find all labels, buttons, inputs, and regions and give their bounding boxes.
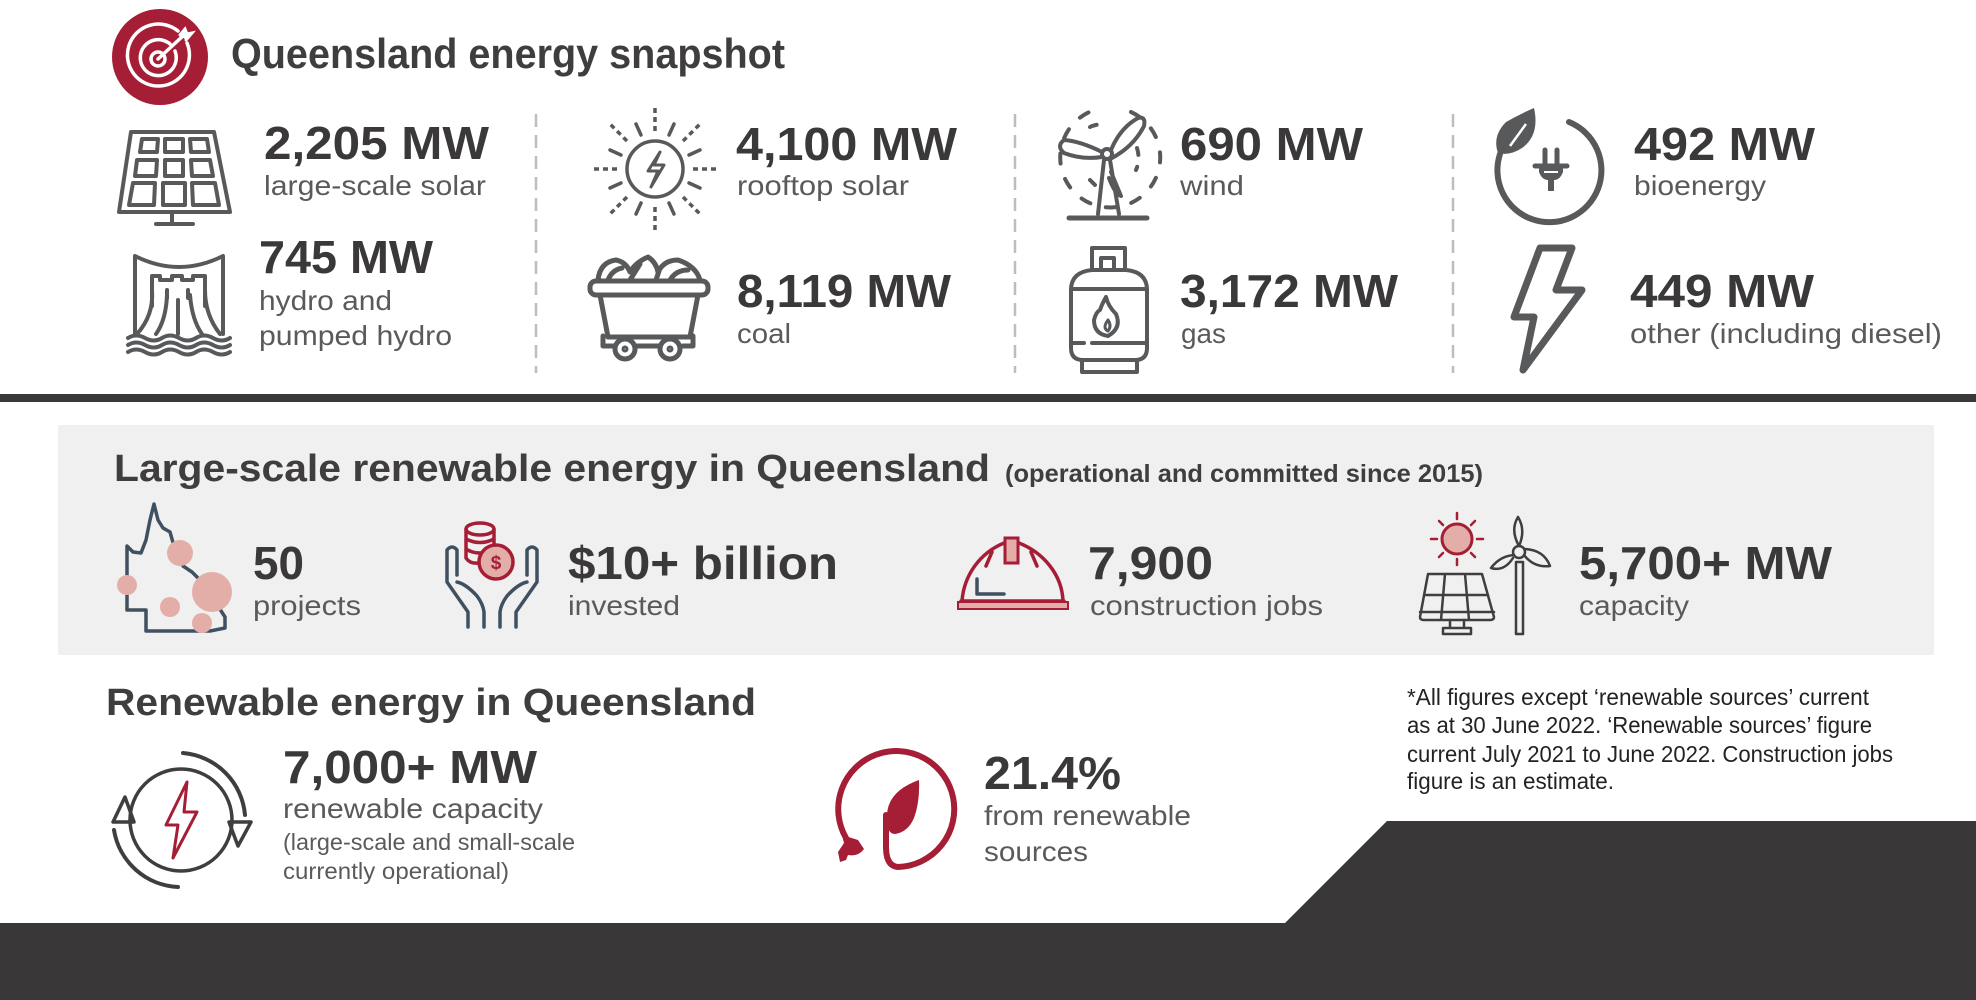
icon: sun, solar panel and wind turbine (1420, 513, 1550, 634)
stat: from renewable sources: 21.4% (984, 747, 1121, 799)
icon: lightning bolt (1514, 248, 1582, 370)
stat: hydro and pumped hydro: hydro and (259, 285, 392, 316)
stat: construction jobs (958, 537, 1323, 621)
icon: hard hat (958, 538, 1068, 609)
stat: invested: invested (568, 590, 680, 621)
icon: leaf with plug cord (838, 751, 954, 867)
stat: renewable capacity (113, 741, 575, 887)
footnote (1407, 684, 1893, 794)
icon: sun with bolt (594, 108, 716, 230)
stat: bioenergy (1496, 108, 1816, 222)
heading: Renewable energy in Queensland: Renewable energy in Queensland (106, 682, 756, 724)
stat: capacity: capacity (1579, 590, 1689, 621)
stat: large-scale solar: large-scale solar (264, 170, 486, 201)
icon: coal cart (590, 257, 708, 359)
icon: hydro dam (128, 256, 230, 354)
stat: bioenergy: 492 MW (1634, 118, 1816, 170)
icon: hands holding coins: $ (491, 553, 502, 574)
footnote: figure is an estimate. (1407, 768, 1614, 794)
footnote: current July 2021 to June 2022. Construction jobs (1407, 741, 1893, 767)
stat: renewable capacity: renewable capacity (283, 793, 543, 824)
subheading: operational and committed since 2015: (operational and committed since 2015) (1005, 460, 1483, 488)
stat: hydro and pumped hydro (128, 231, 452, 354)
stat: renewable capacity: currently operational) (283, 858, 509, 884)
stat: other including diesel (1514, 248, 1942, 370)
icon: hands holding coins (447, 523, 537, 627)
stat: other including diesel: 449 MW (1630, 265, 1815, 317)
stat: invested: $10+ billion (568, 537, 838, 589)
stat: gas (1071, 248, 1399, 372)
stat: construction jobs: 7,900 (1088, 537, 1213, 589)
icon: solar panel (119, 132, 230, 224)
stat: from renewable sources: sources (984, 836, 1088, 867)
stat: wind: wind (1179, 170, 1244, 201)
icon: gas bottle (1071, 248, 1147, 372)
panel: Renewable energy in Queensland (106, 682, 1191, 887)
stat: gas: gas (1181, 318, 1226, 349)
stat: renewable capacity: (large-scale and small-scale (283, 829, 575, 855)
stat: renewable capacity: 7,000+ MW (283, 741, 538, 793)
stat: coal (590, 257, 952, 359)
icon: Queensland map with project circles (117, 504, 232, 633)
stat: capacity (1420, 513, 1833, 634)
stat: large-scale solar (119, 117, 490, 224)
stat: projects: projects (253, 590, 361, 621)
panel: Queensland energy snapshot (112, 9, 1942, 373)
stat: rooftop solar (594, 108, 958, 230)
stat: from renewable sources: from renewable (984, 800, 1191, 831)
stat: gas: 3,172 MW (1180, 265, 1399, 317)
stat: projects (117, 504, 361, 633)
stat: capacity: 5,700+ MW (1579, 537, 1833, 589)
stat: hydro and pumped hydro: 745 MW (259, 231, 434, 283)
heading: Queensland energy snapshot: Queensland energy snapshot (231, 30, 785, 77)
stat: large-scale solar: 2,205 MW (264, 117, 490, 169)
stat: wind (1060, 108, 1364, 218)
stat: rooftop solar: rooftop solar (737, 170, 909, 201)
panel: Large-scale renewable energy (58, 425, 1934, 655)
stat: other including diesel: other (including diesel) (1630, 318, 1942, 349)
heading: Large-scale renewable energy in Queensland: Large-scale renewable energy in Queensland (114, 448, 990, 490)
icon: leaf with plug (1496, 108, 1601, 222)
dark footer shape (0, 821, 1976, 1000)
stat: from renewable sources (838, 747, 1191, 867)
stat: construction jobs: construction jobs (1090, 590, 1323, 621)
stat: invested (447, 523, 838, 627)
icon: wind turbine (1060, 108, 1160, 218)
stat: bioenergy: bioenergy (1634, 170, 1766, 201)
stat: hydro and pumped hydro: pumped hydro (259, 320, 452, 351)
icon: cycle arrows with bolt (113, 753, 251, 887)
footnote: *All figures except ‘renewable sources’ current (1407, 684, 1870, 710)
stat: wind: 690 MW (1180, 118, 1364, 170)
stat: projects: 50 (253, 537, 304, 589)
footnote: as at 30 June 2022. ‘Renewable sources’ figure (1407, 712, 1872, 738)
icon: target with arrow (112, 9, 208, 105)
stat: coal: 8,119 MW (737, 265, 952, 317)
stat: rooftop solar: 4,100 MW (736, 118, 958, 170)
stat: coal: coal (737, 318, 791, 349)
